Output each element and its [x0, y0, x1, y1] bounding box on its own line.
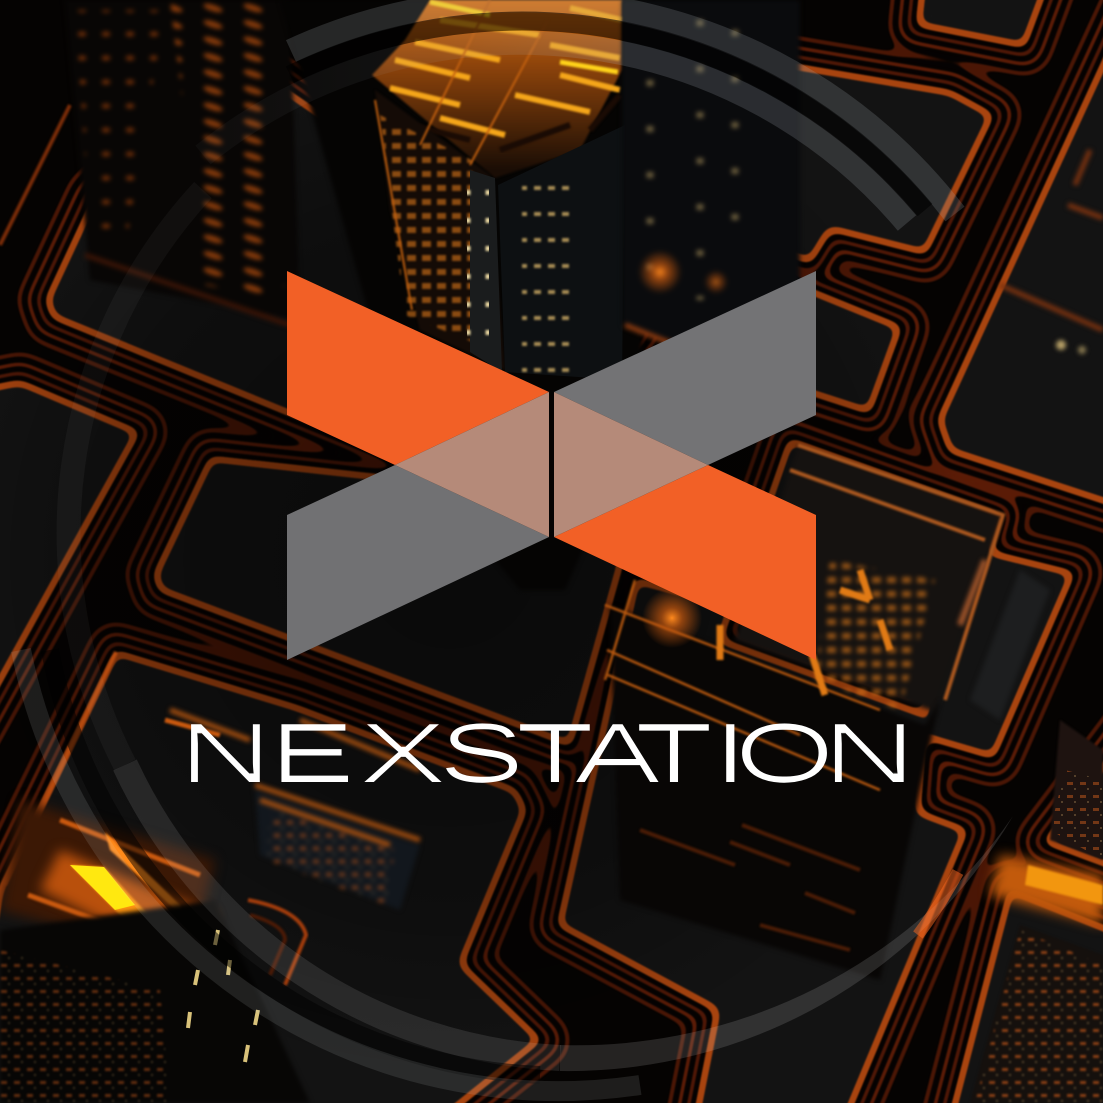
- building: dark tower bottom left corner: [0, 900, 310, 1103]
- logo: tan right overlap: [554, 392, 708, 537]
- building: large dark block bottom centre: [605, 570, 940, 980]
- glass ring: lower arc bands: [21, 650, 1013, 1091]
- building: blue windowed block bottom centre left: [170, 710, 420, 910]
- building: blurred tower top left: [65, 0, 300, 325]
- building: central tower: [280, 0, 650, 590]
- bright trace lower left: [5, 652, 116, 885]
- building: lit mesh tower bottom right: [970, 720, 1103, 1103]
- building: right block with lit grid: [735, 445, 1003, 712]
- glass ring: top arc bands: [203, 0, 955, 223]
- building: bottom left glowing block: [0, 720, 220, 965]
- logo: X mark: [287, 271, 816, 660]
- logo: grey lower left blade: [287, 465, 549, 660]
- logo: tan left overlap: [395, 392, 549, 537]
- glass ring: faint full circle: [69, 190, 203, 765]
- logo: orange upper left blade: [287, 271, 549, 465]
- logo: orange lower right blade: [554, 465, 816, 660]
- hook trace bottom left: [248, 900, 306, 985]
- wordmark: NEXSTATION: [178, 707, 916, 800]
- building: dim tower top right: [622, 0, 800, 395]
- glowing bar right edge: [990, 855, 1103, 925]
- outer trace top left: [0, 105, 70, 245]
- glass ring: tapered crescent lower right: [560, 816, 1013, 1071]
- logo: grey upper right blade: [554, 271, 816, 465]
- building: right panel details: [960, 150, 1103, 720]
